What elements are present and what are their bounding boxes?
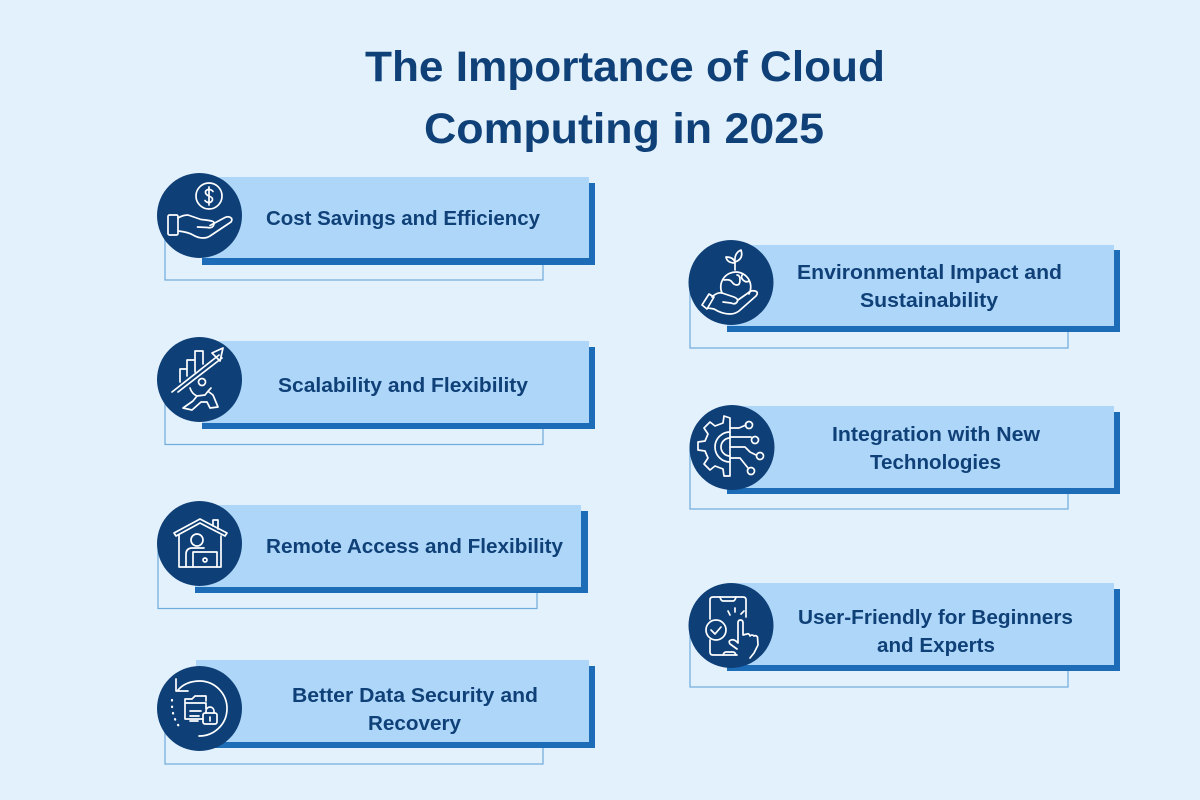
label: Remote Access and Flexibility xyxy=(266,535,564,558)
icon: hand holding globe and sprout xyxy=(702,250,757,314)
icon: phone with tap and check xyxy=(706,597,758,658)
label: Scalability and Flexibility xyxy=(278,374,529,397)
label: Cost Savings and Efficiency xyxy=(266,207,541,230)
title: The Importance of Cloud xyxy=(365,43,885,91)
panel: scalability and flexibility xyxy=(157,337,595,444)
panel: cost savings and efficiency xyxy=(157,173,595,280)
icon: gear and circuit xyxy=(698,416,764,476)
label: Sustainability xyxy=(860,289,999,312)
label: and Experts xyxy=(877,634,995,657)
panel: user-friendly for beginners and experts xyxy=(688,583,1120,687)
label: Environmental Impact and xyxy=(797,261,1062,284)
panel: better data security and recovery xyxy=(157,660,595,764)
label: Better Data Security and xyxy=(292,684,538,707)
label xyxy=(292,684,538,735)
label: User-Friendly for Beginners xyxy=(798,606,1073,629)
label: Technologies xyxy=(870,451,1001,474)
label xyxy=(832,423,1040,474)
panel: integration with new technologies xyxy=(690,405,1120,509)
label: Integration with New xyxy=(832,423,1040,446)
icon: hand holding coin xyxy=(168,183,232,238)
panel: remote access and flexibility xyxy=(157,501,588,608)
title: Computing in 2025 xyxy=(424,105,824,153)
title xyxy=(365,43,885,153)
label: Recovery xyxy=(368,712,462,735)
panel: environmental impact and sustainability xyxy=(688,240,1120,348)
icon: data recovery with lock xyxy=(172,679,227,736)
icon: person working from home xyxy=(174,519,227,567)
icon: figure lifting rising chart xyxy=(172,348,223,410)
label xyxy=(797,261,1062,312)
label xyxy=(798,606,1073,657)
